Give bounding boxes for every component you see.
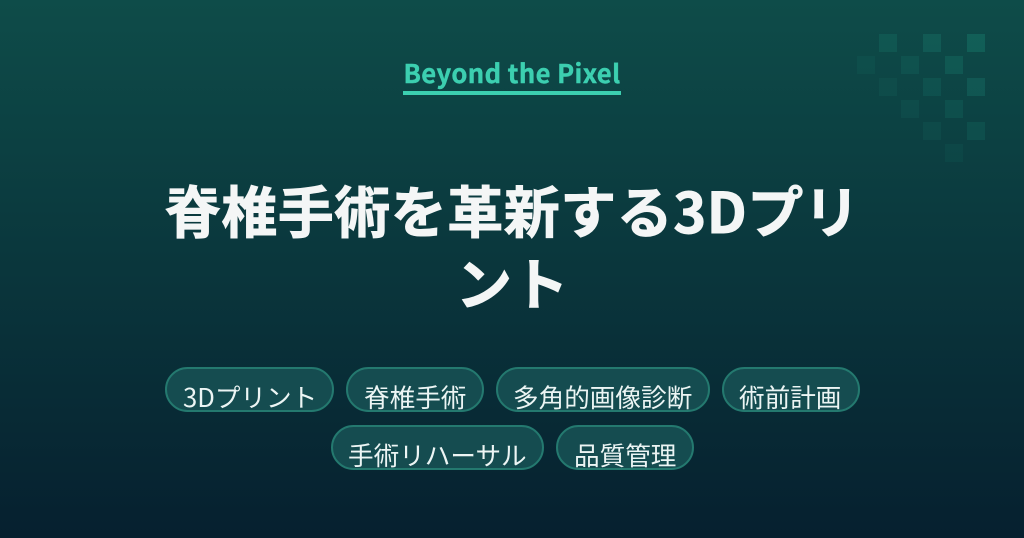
tag: multi-angle imaging: [496, 367, 710, 412]
text: 品質管理: [574, 436, 676, 473]
tag: spine surgery: [346, 367, 484, 412]
title: ント: [456, 241, 569, 322]
text: 多角的画像診断: [513, 378, 692, 415]
title: [165, 169, 860, 322]
tag: quality control: [556, 425, 694, 470]
tag: preoperative planning: [722, 367, 860, 412]
text: 3Dプリント: [183, 378, 317, 415]
text: 脊椎手術: [364, 378, 466, 415]
tag: 3D print: [165, 367, 334, 412]
tag: surgical rehearsal: [331, 425, 544, 470]
decorative pixel grid: [879, 34, 985, 140]
eyebrow heading: Beyond the Pixel: [403, 54, 621, 91]
title: 脊椎手術を革新する3Dプリ: [165, 169, 860, 250]
text: 術前計画: [739, 378, 841, 415]
text: 手術リハーサル: [348, 436, 527, 473]
